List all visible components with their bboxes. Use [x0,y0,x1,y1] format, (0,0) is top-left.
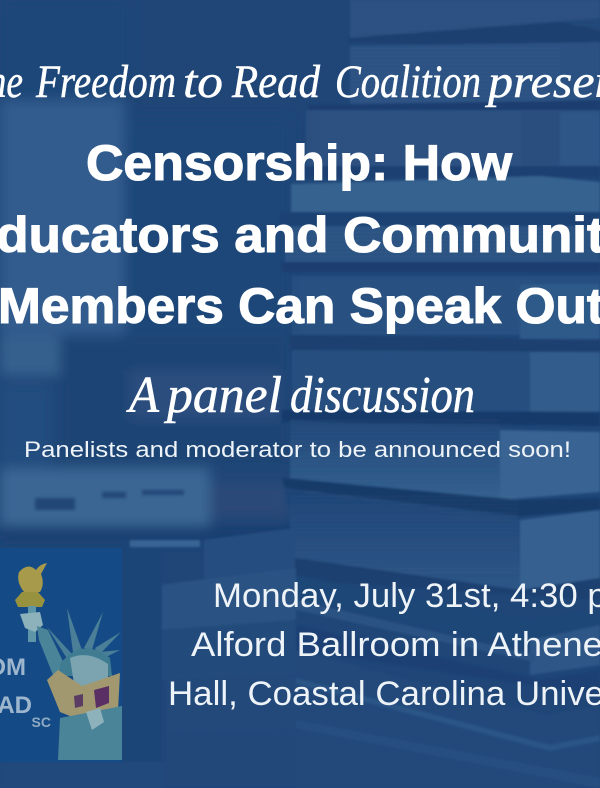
script heading: The Freedom to Read Coalition presents: Read [231,56,320,108]
script heading: The Freedom to Read Coalition presents: to [183,56,223,108]
script subheading: A panel discussion [126,367,475,424]
script heading: The Freedom to Read Coalition presents [0,56,600,108]
script subheading: A panel discussion: A [126,367,159,424]
logo wordmark: SC [32,714,51,730]
script heading: The Freedom to Read Coalition presents: Coalition [335,56,481,108]
logo: Freedom to Read SC [0,548,122,762]
event details: Alford Ballroom in Athene [191,626,600,664]
event details [168,577,600,713]
script subheading: A panel discussion: discussion [290,367,475,424]
panelists note: Panelists and moderator to be announced soon! [24,437,571,462]
script subheading: A panel discussion: panel [163,367,282,424]
script heading: The Freedom to Read Coalition presents: Freedom [35,56,176,108]
main title: Members Can Speak Out [0,278,600,334]
main title: Censorship: How [86,135,512,191]
icon: Statue of Liberty reading [15,563,122,760]
logo wordmark [0,654,51,730]
main title [0,135,600,334]
